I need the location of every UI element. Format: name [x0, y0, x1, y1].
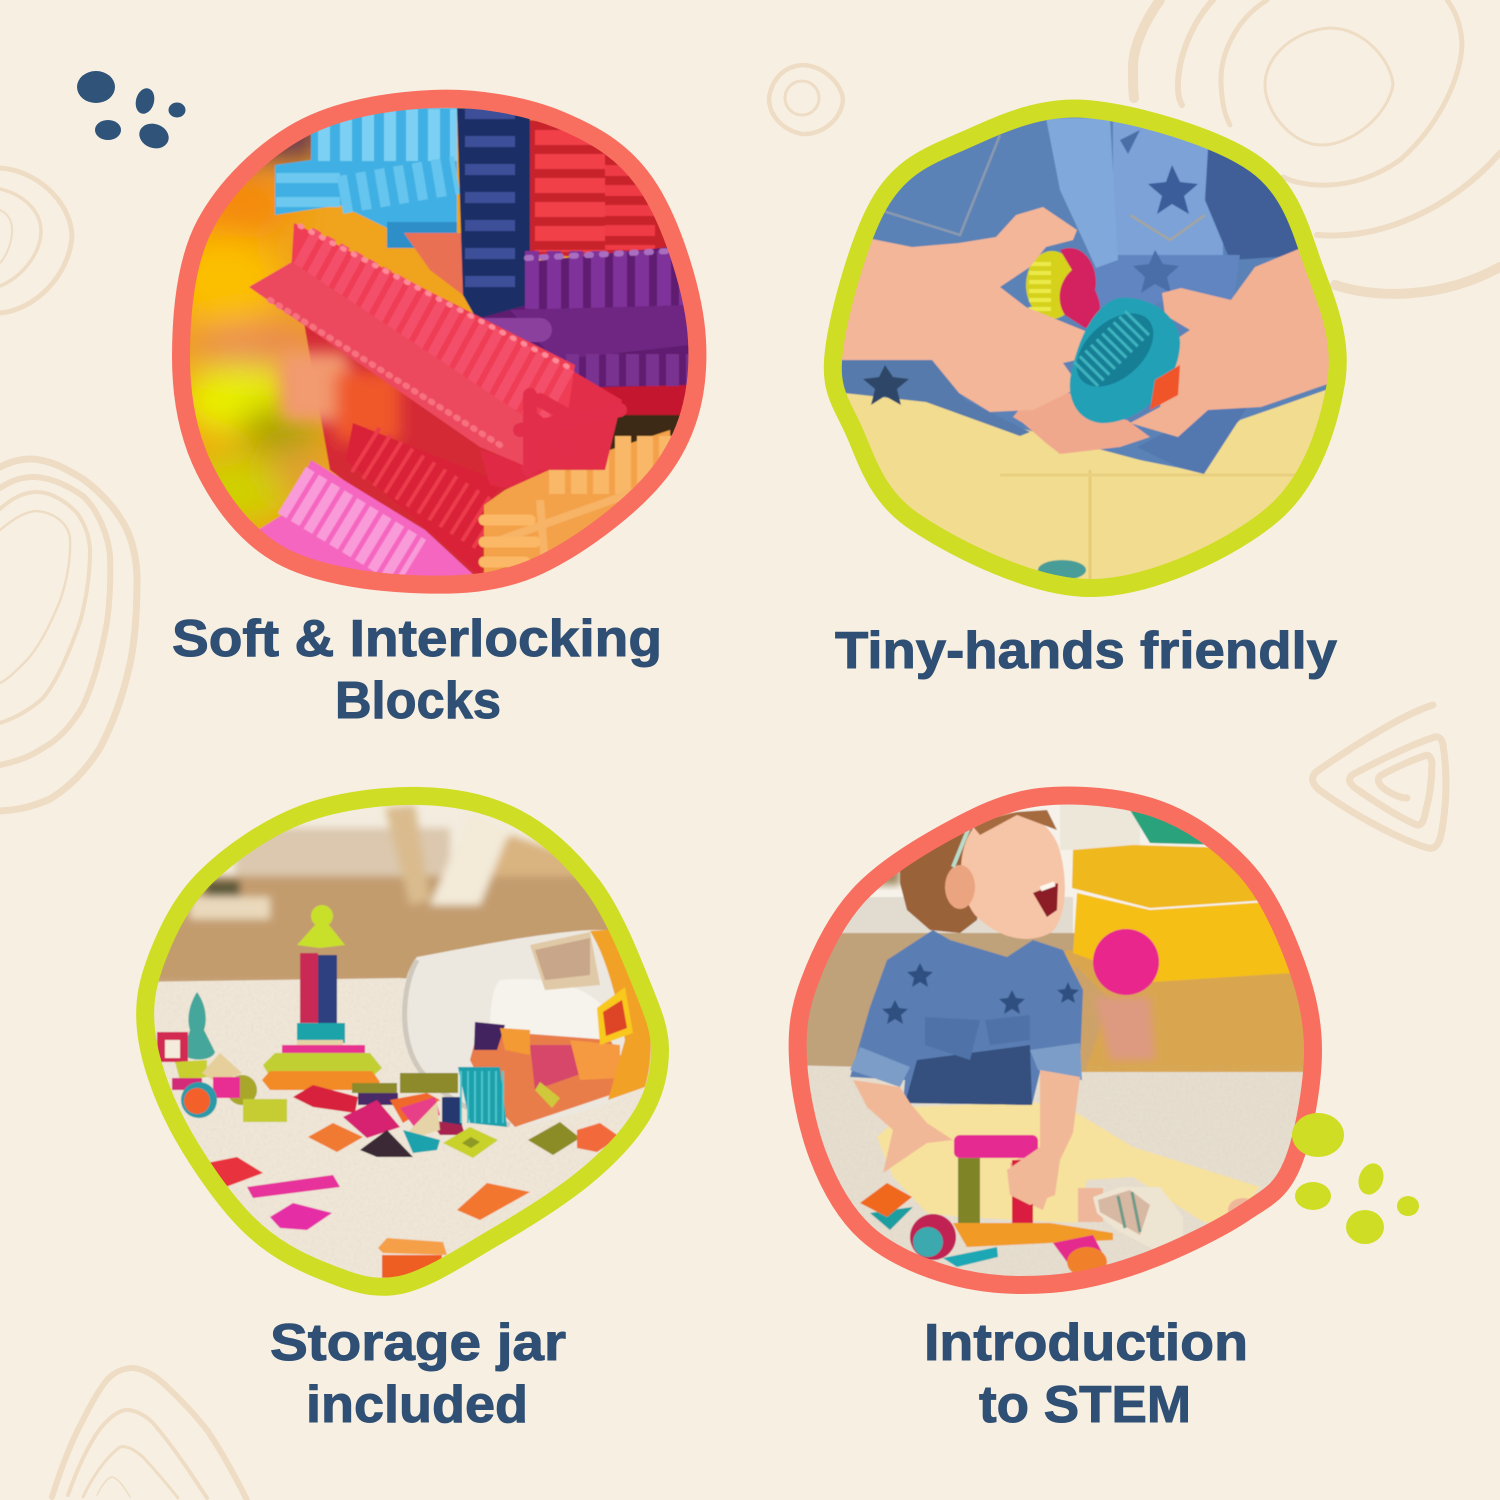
panel: soft blocks photo: [170, 90, 710, 600]
palm below: [1013, 393, 1150, 454]
floor: [806, 932, 1076, 1068]
navy block: [457, 108, 530, 345]
purple block: [480, 245, 690, 388]
face: [945, 810, 1065, 939]
arms: [853, 1070, 1080, 1210]
orange block: [484, 430, 672, 575]
icon: green dots: [1292, 1113, 1419, 1244]
large red block: [249, 223, 622, 470]
blob outline: coral: [181, 99, 697, 585]
teal toy: [1063, 298, 1180, 423]
panel: tiny hands photo: [825, 100, 1350, 600]
heading: tiny-hands friendly: Tiny-hands friendly: [835, 622, 1337, 680]
heading: introduction to STEM: to STEM: [979, 1376, 1191, 1434]
pillow: [1130, 811, 1205, 846]
heading: storage jar included: Storage jar: [270, 1314, 566, 1372]
yellow and pink toy: [1025, 247, 1101, 329]
red underlay between blocks: [304, 325, 549, 574]
heading: soft and interlocking blocks: Soft & Interlocking: [172, 610, 662, 668]
center pile: [293, 1067, 620, 1158]
red block upper right: [529, 120, 667, 257]
foot and shoe: [1078, 1186, 1250, 1248]
pants: [877, 1102, 1260, 1230]
dark red lower block: [348, 423, 545, 549]
yellow cushion: [1072, 845, 1293, 982]
rug: [157, 977, 574, 1202]
shirt lower right: [1137, 406, 1248, 474]
toys: [860, 1135, 1113, 1277]
ball: [1093, 929, 1159, 1060]
blurred room: [158, 805, 608, 982]
orange blurry block left: [280, 352, 400, 442]
heading: introduction to STEM: [924, 1314, 1248, 1434]
blob outline: coral: [798, 796, 1313, 1285]
blob outline: green: [833, 108, 1338, 588]
rug: [808, 1064, 1303, 1276]
heading: storage jar included: included: [306, 1376, 528, 1434]
tower: [262, 905, 382, 1090]
jar: [402, 929, 651, 1127]
patch behind blocks: [404, 233, 463, 295]
shirt panels: [884, 118, 1298, 308]
panel: introduction to STEM photo: [785, 785, 1330, 1295]
panel: storage jar photo: [135, 785, 675, 1300]
left pieces: [157, 992, 287, 1122]
right arm and hand: [1130, 248, 1345, 437]
blob outline: green: [145, 796, 660, 1287]
heading: introduction to STEM: Introduction: [924, 1314, 1248, 1372]
pink block: [259, 460, 474, 576]
heading: soft and interlocking blocks: [172, 610, 662, 730]
hair: [900, 823, 985, 933]
icon: navy dots: [77, 71, 186, 152]
shirt: [850, 930, 1083, 1105]
pants: [846, 389, 1326, 579]
shirt lower left: [835, 360, 1030, 436]
heading: soft and interlocking blocks: Blocks: [335, 672, 501, 730]
blue block: [275, 108, 457, 248]
dark area under purple: [609, 414, 680, 450]
front pieces: [207, 1157, 530, 1278]
left arm and hand: [835, 207, 1103, 412]
heading: storage jar included: [270, 1314, 566, 1434]
